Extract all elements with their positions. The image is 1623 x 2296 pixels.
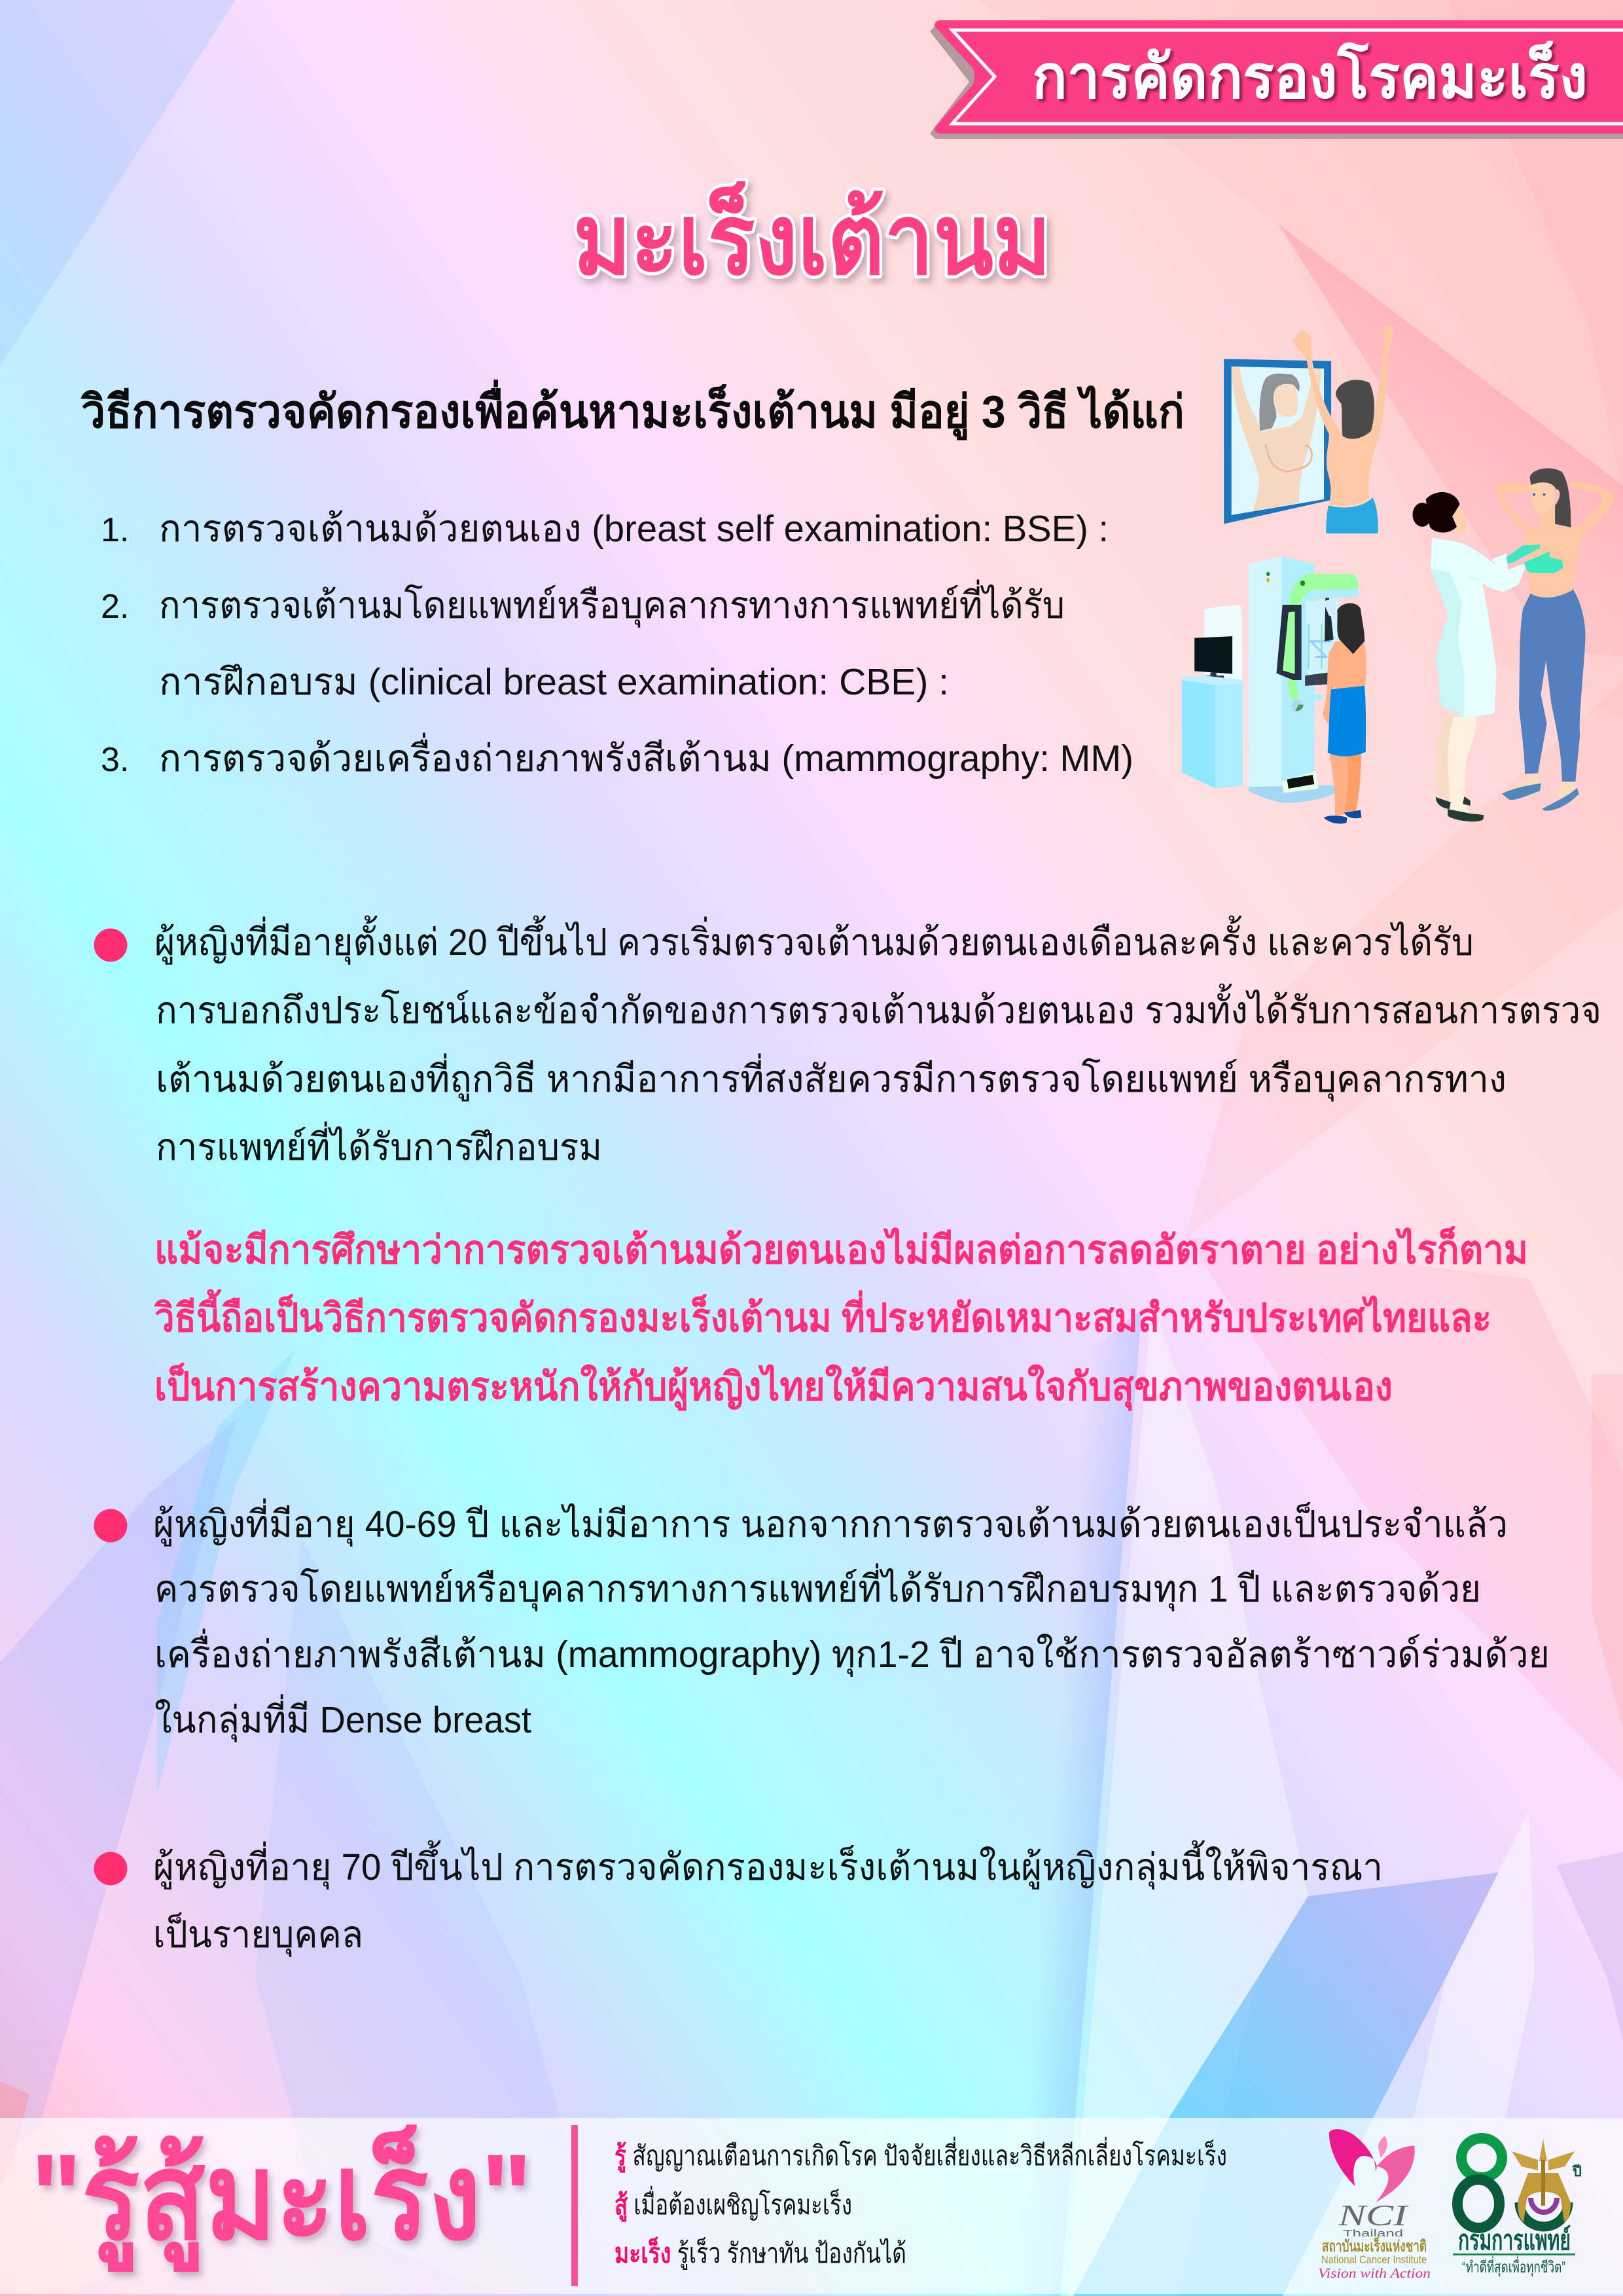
pink highlighted note: วิธีนี้ถือเป็นวิธีการตรวจคัดกรองมะเร็งเต้านม ที่ประหยัดเหมาะสมสำหรับประเทศไทยและ [154,1289,1491,1340]
bullet point: women aged 40-69: ควรตรวจโดยแพทย์หรือบุคลากรทางการแพทย์ที่ได้รับการฝึกอบรมทุก 1 ปี และตรวจด้วย [154,1563,1481,1612]
logo: National Cancer Institute: NCI [1338,2198,1410,2232]
logo: Department of Medical Services 80 years: กรมการแพทย์ [1458,2225,1571,2255]
illustration: self examination, mammography and clinical examination [1182,325,1614,824]
slogan explanation: มะเร็ง รู้เร็ว รักษาทัน ป้องกันได้ [615,2236,906,2270]
pink highlighted note: เป็นการสร้างความตระหนักให้กับผู้หญิงไทยให้มีความสนใจกับสุขภาพของตนเอง [154,1363,1393,1411]
logo: National Cancer Institute: National Cancer Institute [1321,2253,1427,2266]
numbered list of screening methods: การตรวจเต้านมโดยแพทย์หรือบุคลากรทางการแพทย์ที่ได้รับ [159,579,1065,628]
slogan explanation [615,2137,1227,2270]
bullet point: self examination from age 20: การแพทย์ที่ได้รับการฝึกอบรม [156,1121,602,1168]
numbered list of screening methods [101,508,1133,780]
footer band [0,2118,1623,2294]
pink highlighted note [154,1226,1528,1411]
logo: National Cancer Institute: สถาบันมะเร็งแห่งชาติ [1322,2236,1427,2255]
icon: doctor examining patient [1412,468,1614,821]
bullet point: self examination from age 20: ผู้หญิงที่มีอายุตั้งแต่ 20 ปีขึ้นไป ควรเริ่มตรวจเต้านมด้วยตนเองเดือนละครั้ง และควรได้รับ [154,916,1474,965]
icon: mammography machine with patient [1182,556,1366,824]
bullet point: women aged 40-69: เครื่องถ่ายภาพรังสีเต้านม (mammography) ทุก1-2 ปี อาจใช้การตรวจอัลตร้าซาวด์ร่วมด้วย [154,1628,1550,1677]
logo: Department of Medical Services 80 years [1453,2138,1582,2277]
numbered list of screening methods: 1. [101,511,129,549]
numbered list of screening methods: การฝึกอบรม (clinical breast examination: CBE) : [159,661,949,703]
bullet point: women aged 70 and over: ผู้หญิงที่อายุ 70 ปีขึ้นไป การตรวจคัดกรองมะเร็งเต้านมในผู้หญิงกลุ่มนี้ให้พิจารณา [153,1840,1383,1890]
numbered list of screening methods: การตรวจด้วยเครื่องถ่ายภาพรังสีเต้านม (mammography: MM) [159,732,1133,780]
numbered list of screening methods: การตรวจเต้านมด้วยตนเอง (breast self examination: BSE) : [159,508,1109,550]
banner title: การคัดกรองโรคมะเร็ง [1032,41,1588,111]
bullet point: women aged 70 and over: เป็นรายบุคคล [153,1912,363,1958]
logo: National Cancer Institute: Vision with Action [1318,2265,1431,2281]
logo: Department of Medical Services 80 years: “ทำดีที่สุดเพื่อทุกชีวิต” [1462,2256,1565,2277]
icon: woman at mirror [1224,325,1393,533]
pink highlighted note: แม้จะมีการศึกษาว่าการตรวจเต้านมด้วยตนเองไม่มีผลต่อการลดอัตราตาย อย่างไรก็ตาม [154,1226,1528,1272]
top ribbon banner [930,20,1623,139]
numbered list of screening methods: 3. [101,741,129,779]
logo: National Cancer Institute: Thailand [1343,2228,1403,2239]
slogan explanation: รู้ สัญญาณเตือนการเกิดโรค ปัจจัยเสี่ยงและวิธีหลีกเลี่ยงโรคมะเร็ง [615,2137,1227,2173]
slogan explanation: สู้ เมื่อต้องเผชิญโรคมะเร็ง [615,2186,852,2222]
campaign slogan: "รู้สู้มะเร็ง" [31,2124,532,2272]
numbered list of screening methods: 2. [101,588,129,626]
bullet point: self examination from age 20: เต้านมด้วยตนเองที่ถูกวิธี หากมีอาการที่สงสัยควรมีการตรวจโดยแพทย์ หรือบุคลากรทาง [156,1053,1507,1102]
logo: Department of Medical Services 80 years: ปี [1572,2163,1582,2179]
subheading: วิธีการตรวจคัดกรองเพื่อค้นหามะเร็งเต้านม มีอยู่ 3 วิธี ได้แก่ [80,379,1185,440]
logo: National Cancer Institute [1318,2129,1431,2281]
bullet point: women aged 70 and over [94,1840,1383,1958]
bullet point: women aged 40-69 [94,1498,1550,1743]
bullet point: women aged 40-69: ผู้หญิงที่มีอายุ 40-69 ปี และไม่มีอาการ นอกจากการตรวจเต้านมด้วยตนเองเป็นประจำแล้ว [153,1498,1508,1547]
bullet point: women aged 40-69: ในกลุ่มที่มี Dense breast [154,1694,531,1743]
bullet point: self examination from age 20 [94,916,1601,1168]
main title: มะเร็งเต้านม [573,181,1051,295]
